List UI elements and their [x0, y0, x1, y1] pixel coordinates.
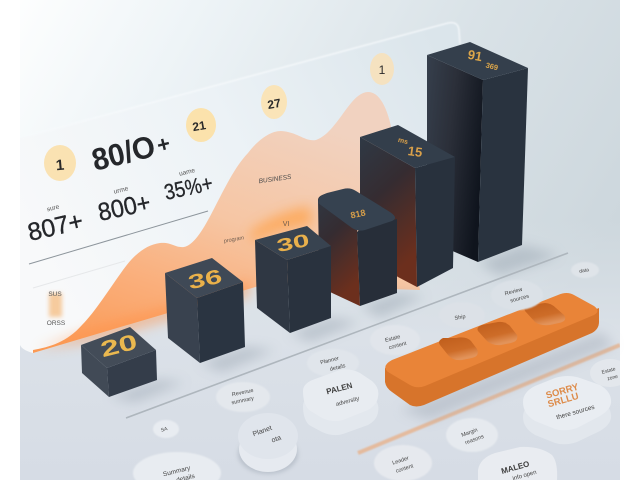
bar 3 label: 818	[350, 208, 366, 220]
bar 3	[318, 188, 397, 306]
badge: step 1: 1	[55, 157, 65, 174]
bar 4: 15	[407, 143, 423, 160]
pill: note center: Planner	[320, 356, 340, 366]
tray hole 1	[439, 337, 478, 360]
pill: note upper: Review	[504, 287, 523, 297]
pill: note center	[307, 349, 359, 377]
pill: note bottom center: Margin	[461, 427, 479, 439]
divider line	[33, 261, 125, 288]
bar 5 tallest: 91	[467, 47, 484, 64]
pill: note upper: sources	[510, 294, 530, 304]
pill: note left	[216, 382, 270, 412]
button: round: Planet	[252, 425, 273, 438]
tray shadow	[400, 332, 615, 420]
area chart	[33, 92, 420, 353]
badge: step 1 right	[370, 53, 394, 85]
button: square left: PALEN	[325, 381, 354, 396]
bar 5 tallest	[427, 42, 528, 262]
button: large orange label: there sources	[556, 404, 596, 421]
axis rule	[126, 253, 568, 418]
button: large orange label: SORRY	[545, 382, 581, 401]
bar 5 tallest: 369	[485, 61, 499, 72]
orange tray	[385, 293, 599, 406]
stat: 807+: sure	[46, 203, 60, 213]
pill: small tag: SA	[160, 426, 169, 434]
bar 30: 30	[275, 230, 311, 256]
stat: 35%+: 35%+	[162, 170, 215, 205]
pill: note mid: Estate	[384, 334, 401, 344]
pill: note left: Revenue	[231, 388, 254, 398]
badge: step 27: 27	[266, 96, 282, 112]
tray top	[385, 293, 598, 387]
stat: 35%+: uame	[178, 167, 196, 178]
pill: note bottom center: reasons	[464, 434, 485, 446]
badge: step 1	[44, 145, 76, 181]
axis tag	[47, 291, 66, 327]
accent rule	[358, 345, 620, 453]
pill: faint tag	[439, 302, 485, 328]
bar 36: 36	[186, 266, 224, 294]
bar 5 right face	[478, 68, 528, 262]
pill: faint tag: Ship	[454, 314, 466, 322]
pill: note center: details	[329, 363, 346, 373]
chart label: BUSINESS	[258, 174, 292, 185]
chart base glow	[36, 280, 250, 350]
badge: step 21: 21	[191, 118, 207, 134]
badge: step 1 right: 1	[379, 63, 386, 77]
axis tag: SUS	[48, 291, 62, 298]
bar 20	[81, 327, 157, 397]
pill: right edge note: zone	[607, 374, 619, 382]
small chart note: VI	[283, 221, 289, 228]
stat: 800+: urme	[113, 185, 130, 196]
bar 30	[255, 226, 331, 333]
pill: small tag right	[571, 262, 599, 278]
pill: small tag	[153, 420, 179, 438]
bar 20: 20	[98, 329, 140, 362]
tray hole 3	[524, 303, 565, 325]
pill: note upper	[491, 280, 543, 310]
bar 5 top	[427, 42, 528, 80]
button: round: ota	[271, 435, 282, 445]
pill: bottom left: Summary	[162, 465, 192, 478]
pill: note mid	[370, 325, 420, 355]
bar 4	[360, 125, 455, 287]
headline stat: 80/O	[88, 128, 159, 178]
button: large orange label: SRLLU	[547, 391, 580, 410]
pill: right edge note	[590, 359, 620, 387]
axis tag: ORSS	[47, 320, 66, 327]
tray hole 2	[478, 322, 517, 345]
card: bottom center	[478, 447, 557, 480]
button: square left	[303, 369, 378, 435]
headline stat: +	[154, 130, 173, 158]
axis line	[29, 211, 208, 264]
pill: note bottom: Leader	[392, 455, 410, 467]
pill: bottom left	[133, 452, 221, 480]
button: round	[238, 413, 298, 474]
pill: small tag right: data	[579, 267, 590, 275]
bar 36	[165, 258, 245, 363]
pill: note left: summary	[231, 396, 255, 406]
button: large orange label	[523, 376, 611, 444]
tray side	[385, 308, 599, 406]
bar 5 left face	[427, 55, 483, 262]
area glow	[250, 206, 312, 242]
badge: step 21	[186, 108, 216, 142]
pill: note bottom: content	[395, 463, 415, 475]
bar 4 labels: ms	[397, 137, 409, 146]
stat: 807+: 807+	[25, 207, 86, 247]
pill: note bottom	[374, 445, 432, 480]
floor shadows	[109, 245, 560, 402]
chart small label: program	[223, 235, 245, 245]
pill: note mid: content	[388, 341, 408, 351]
badge: step 27	[261, 85, 287, 119]
pill: right edge note: Estate	[601, 366, 617, 376]
panel: glass chart board	[20, 23, 460, 353]
pill: note bottom center	[446, 418, 498, 452]
stat: 800+: 800+	[95, 188, 153, 227]
card: bottom center: MALEO	[500, 459, 530, 476]
button: square left: adversity	[335, 396, 360, 408]
